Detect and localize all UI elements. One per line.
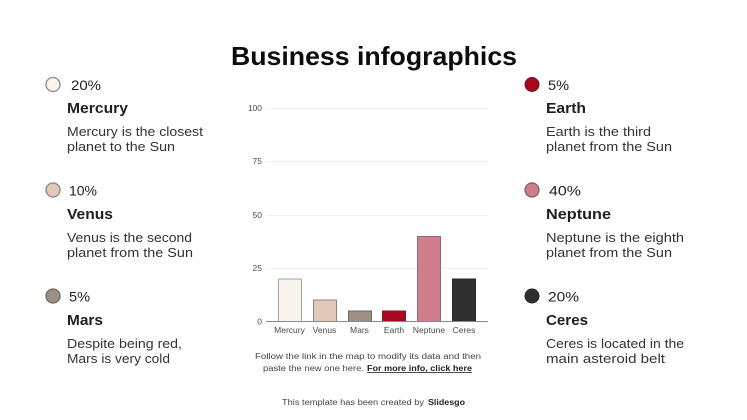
- y axis labels: 75: [253, 156, 262, 166]
- y axis labels: 100: [248, 103, 262, 113]
- Venus description: planet from the Sun: [67, 245, 193, 260]
- x axis labels: Earth: [384, 325, 404, 335]
- panel: Earth: [525, 77, 672, 154]
- Venus percentage: 10%: [69, 182, 97, 198]
- Mercury description: Mercury is the closest: [67, 124, 203, 139]
- Ceres name: Ceres: [546, 313, 588, 329]
- Neptune description: Neptune is the eighth: [546, 230, 684, 245]
- Mars name: Mars: [67, 313, 103, 329]
- panel: Venus: [46, 182, 193, 260]
- x axis labels: Venus: [313, 325, 336, 335]
- Mars description: Despite being red,: [67, 336, 182, 351]
- Neptune percentage: 40%: [549, 182, 581, 198]
- icon: Mars dot: [46, 289, 60, 303]
- x axis labels: Neptune: [413, 325, 445, 335]
- icon: Mercury dot: [46, 78, 60, 92]
- icon: Ceres dot: [525, 289, 539, 303]
- Ceres description: main asteroid belt: [546, 351, 665, 366]
- Mercury percentage: 20%: [71, 77, 101, 93]
- bar chart: [248, 103, 488, 335]
- y axis labels: 50: [253, 210, 262, 220]
- panel: Neptune: [525, 182, 684, 260]
- x axis labels: Ceres: [453, 325, 475, 335]
- credit: This template has been created by: [282, 398, 424, 407]
- Neptune description: planet from the Sun: [546, 245, 672, 260]
- Mars description: Mars is very cold: [67, 351, 170, 366]
- icon: Earth dot: [525, 78, 539, 92]
- Venus description: Venus is the second: [67, 230, 192, 245]
- y axis labels: 25: [253, 263, 262, 273]
- credit: [282, 398, 465, 407]
- credit: Slidesgo: [428, 398, 465, 407]
- Mercury description: planet to the Sun: [67, 139, 175, 154]
- Venus name: Venus: [67, 207, 113, 223]
- chart note: Follow the link in the map to modify its data and then: [255, 352, 481, 361]
- y axis labels: 0: [257, 316, 262, 326]
- icon: Neptune dot: [525, 183, 539, 197]
- Earth percentage: 5%: [548, 77, 569, 93]
- panel: Mars: [46, 288, 182, 366]
- chart note: For more info, click here: [367, 364, 473, 373]
- Earth description: Earth is the third: [546, 124, 651, 139]
- y axis labels: [248, 103, 262, 326]
- x axis labels: Mars: [350, 325, 369, 335]
- panel: Ceres: [525, 288, 684, 366]
- panel: Mercury: [46, 77, 203, 154]
- title: Business infographics: [231, 41, 517, 71]
- Ceres description: Ceres is located in the: [546, 336, 684, 351]
- x axis labels: Mercury: [274, 325, 306, 335]
- chart note: [255, 352, 481, 373]
- Ceres percentage: 20%: [548, 288, 579, 304]
- Mercury name: Mercury: [67, 101, 128, 117]
- Neptune name: Neptune: [546, 207, 611, 223]
- Earth description: planet from the Sun: [546, 139, 672, 154]
- Mars percentage: 5%: [69, 288, 90, 304]
- bars: [278, 236, 476, 322]
- icon: Venus dot: [46, 183, 60, 197]
- chart note: paste the new one here.: [263, 364, 364, 373]
- x axis labels: [274, 325, 475, 335]
- Earth name: Earth: [546, 101, 586, 117]
